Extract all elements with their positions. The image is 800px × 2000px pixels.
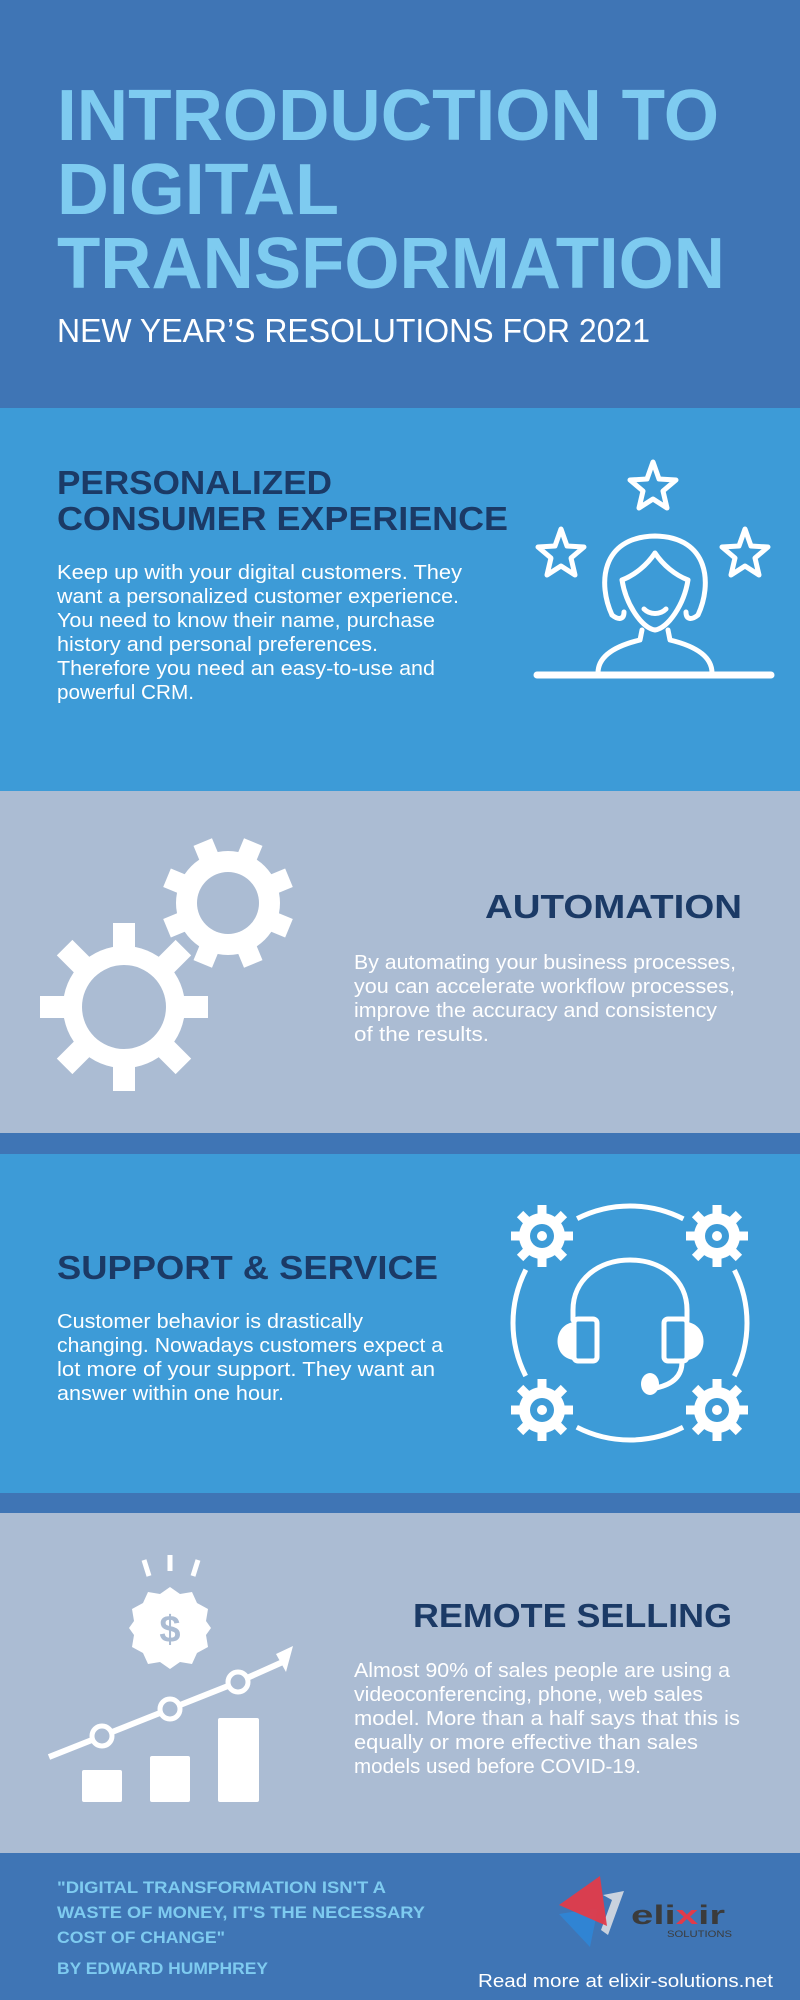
text block: automation [354, 952, 736, 1046]
text block: automation: you can accelerate workflow processes, [354, 976, 735, 998]
title: DIGITAL [57, 150, 339, 230]
quote: WASTE OF MONEY, IT'S THE NECESSARY [57, 1903, 426, 1922]
heading: remote selling: REMOTE SELLING [413, 1597, 732, 1634]
text block: personalized: You need to know their name, purchase [57, 610, 435, 632]
panel: personalized consumer experience [0, 408, 800, 791]
text block: support: lot more of your support. They want an [57, 1359, 435, 1381]
text block: personalized: powerful CRM. [57, 682, 194, 704]
icon: gears [40, 838, 293, 1091]
text block: support: changing. Nowadays customers expect a [57, 1335, 444, 1357]
panel: automation [0, 791, 800, 1133]
text block: remote selling [354, 1660, 740, 1778]
title: INTRODUCTION TO [57, 76, 719, 156]
text block: support: Customer behavior is drastically [57, 1311, 363, 1333]
heading: personalized: PERSONALIZED [57, 464, 332, 501]
subtitle: NEW YEAR’S RESOLUTIONS FOR 2021 [57, 312, 650, 349]
text block: personalized: Keep up with your digital customers. They [57, 562, 462, 584]
panel: support & service [0, 1154, 800, 1493]
quote: BY EDWARD HUMPHREY [57, 1959, 269, 1978]
logo: elixir solutions: eli x ir [631, 1900, 726, 1930]
icon: headset with gears [511, 1205, 748, 1441]
heading: personalized: CONSUMER EXPERIENCE [57, 500, 508, 537]
logo: elixir solutions: SOLUTIONS [667, 1929, 732, 1939]
heading: personalized [57, 464, 508, 537]
quote: COST OF CHANGE" [57, 1928, 225, 1947]
text block: remote selling: Almost 90% of sales people are using a [354, 1660, 731, 1682]
header panel [0, 0, 800, 408]
text block: support [57, 1311, 444, 1405]
text block: remote selling: models used before COVID-19. [354, 1756, 641, 1778]
heading: automation: AUTOMATION [485, 888, 742, 925]
text block: remote selling: model. More than a half says that this is [354, 1708, 740, 1730]
link text: Read more at elixir-solutions.net [478, 1971, 773, 1991]
text block: automation: of the results. [354, 1024, 489, 1046]
text block: personalized: want a personalized customer experience. [56, 586, 459, 608]
icon: growth chart with dollar badge: $ [159, 1609, 181, 1651]
logo: elixir solutions [559, 1876, 732, 1947]
title [57, 76, 725, 304]
text block: automation: By automating your business processes, [354, 952, 736, 974]
footer panel [0, 1853, 800, 2000]
title: TRANSFORMATION [57, 224, 725, 304]
quote [57, 1878, 426, 1978]
quote: "DIGITAL TRANSFORMATION ISN'T A [57, 1878, 386, 1897]
icon: growth chart with dollar badge [49, 1555, 293, 1802]
text block: personalized: history and personal preferences. [57, 634, 378, 656]
icon: person with stars [537, 462, 771, 675]
text block: remote selling: equally or more effective than sales [354, 1732, 698, 1754]
panel: remote selling [0, 1513, 800, 1853]
heading: support: SUPPORT & SERVICE [57, 1249, 438, 1286]
text block: support: answer within one hour. [57, 1383, 284, 1405]
text block: remote selling: videoconferencing, phone, web sales [354, 1684, 703, 1706]
text block: personalized [56, 562, 462, 704]
text block: automation: improve the accuracy and consistency [354, 1000, 717, 1022]
text block: personalized: Therefore you need an easy-to-use and [57, 658, 435, 680]
